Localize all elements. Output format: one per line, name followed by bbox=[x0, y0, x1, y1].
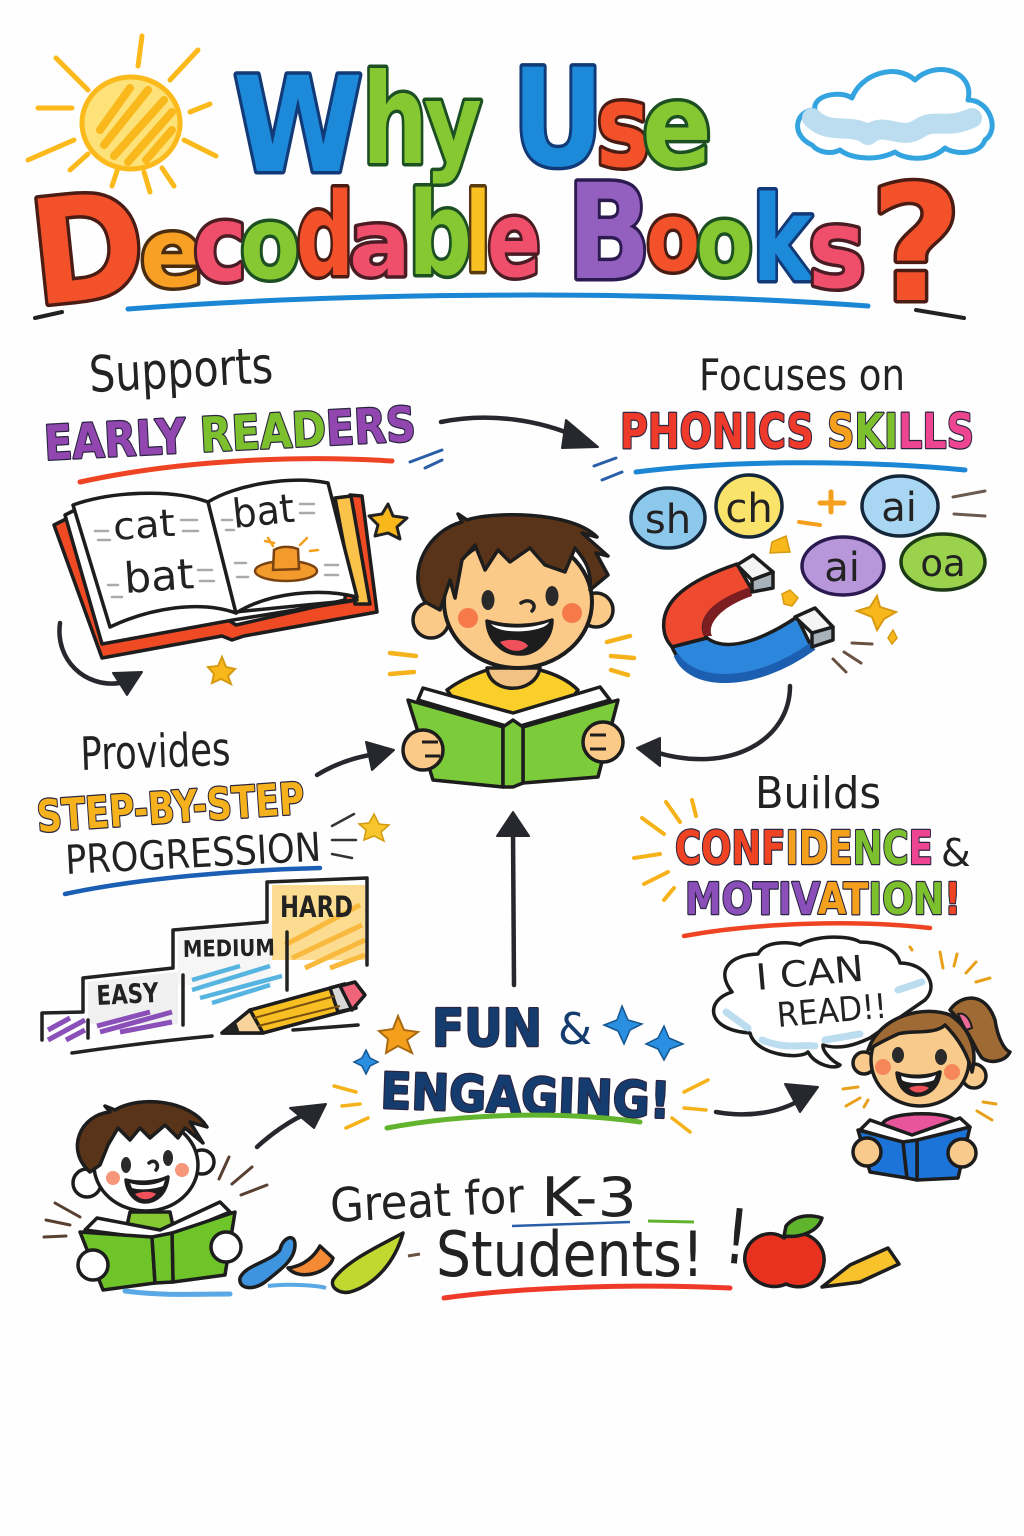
title: o bbox=[646, 183, 700, 293]
title: b bbox=[408, 168, 472, 302]
chart: easy medium hard steps: EASY bbox=[96, 978, 160, 1012]
heading: great for k-3 students bbox=[329, 1166, 753, 1298]
heading: fun and engaging bbox=[334, 999, 708, 1132]
title underline bbox=[35, 295, 964, 318]
arrow: boy to fun bbox=[257, 1104, 326, 1147]
illustration: phonics bubbles: ai bbox=[824, 545, 860, 591]
heading: provides step-by-step progression bbox=[35, 722, 389, 894]
heading: provides step-by-step progression: Provides bbox=[79, 722, 231, 781]
illustration: phonics bubbles: sh bbox=[645, 497, 691, 543]
heading: supports early readers bbox=[43, 336, 442, 482]
illustration: phonics bubbles bbox=[631, 475, 985, 595]
illustration: boy reading at centre bbox=[390, 514, 634, 787]
illustration: phonics bubbles: ch bbox=[725, 486, 773, 532]
title bbox=[22, 40, 962, 340]
speech bubble: I can read: READ!! bbox=[775, 987, 888, 1036]
icon: yellow crayon bbox=[822, 1248, 899, 1287]
chart: easy medium hard steps: HARD bbox=[280, 890, 353, 924]
title: s bbox=[596, 60, 650, 194]
title: W bbox=[233, 49, 363, 203]
title: a bbox=[349, 192, 411, 297]
arrow: curved under book bbox=[59, 623, 142, 695]
title: y bbox=[424, 61, 482, 186]
speech bubble: I can read: I CAN bbox=[754, 949, 865, 999]
arrow: provides to boy bbox=[317, 742, 394, 775]
icon: small star under book bbox=[208, 657, 235, 684]
title: h bbox=[362, 48, 428, 193]
heading: builds confidence and motivation bbox=[634, 768, 971, 936]
illustration: boy reading bottom left bbox=[44, 1102, 267, 1294]
heading: supports early readers: Supports bbox=[88, 336, 274, 404]
heading: great for k-3 students: K-3 bbox=[541, 1166, 637, 1229]
illustration: horseshoe magnet bbox=[664, 536, 897, 681]
heading: provides step-by-step progression: STEP-BY-STEP bbox=[35, 773, 306, 843]
heading: focuses on phonics skills: PHONICS SKILLS bbox=[620, 404, 974, 460]
arrow: fun to girl bbox=[716, 1084, 818, 1114]
title: D bbox=[22, 160, 153, 340]
arrow: readers to phonics bbox=[441, 418, 598, 448]
title: e bbox=[140, 199, 204, 309]
illustration: open book with words: cat bbox=[112, 501, 176, 549]
illustration: girl reading bbox=[843, 998, 1010, 1180]
heading: great for k-3 students: ! bbox=[720, 1191, 753, 1282]
heading: builds confidence and motivation: MOTIVATION! bbox=[685, 874, 961, 925]
icon: apple bbox=[745, 1216, 824, 1287]
speech bubble: I can read bbox=[714, 937, 990, 1067]
heading: great for k-3 students: Students! bbox=[436, 1218, 704, 1291]
title: s bbox=[808, 185, 866, 313]
icon: sun bbox=[28, 36, 216, 192]
chart: easy medium hard steps bbox=[42, 878, 367, 1053]
heading: fun and engaging: & bbox=[558, 1004, 592, 1055]
heading: focuses on phonics skills bbox=[594, 350, 974, 480]
arrow: fun up to boy bbox=[497, 812, 529, 985]
title: o bbox=[696, 185, 753, 299]
illustration: phonics bubbles: oa bbox=[920, 542, 966, 585]
icon: cloud bbox=[798, 70, 992, 158]
chart: easy medium hard steps: MEDIUM bbox=[183, 935, 275, 963]
heading: fun and engaging: ENGAGING! bbox=[380, 1062, 671, 1130]
heading: supports early readers: EARLY READERS bbox=[43, 397, 417, 472]
title: U bbox=[512, 40, 604, 197]
icon: pencil bbox=[222, 982, 365, 1033]
icon: crayons bbox=[240, 1233, 403, 1292]
heading: builds confidence and motivation: & bbox=[941, 831, 971, 875]
heading: focuses on phonics skills: Focuses on bbox=[699, 350, 905, 401]
title: l bbox=[465, 169, 491, 297]
title: ? bbox=[870, 151, 962, 338]
heading: great for k-3 students: Great for bbox=[329, 1169, 526, 1234]
illustration: open book with words: bat bbox=[122, 549, 196, 603]
arrow: magnet to boy bbox=[637, 686, 790, 766]
illustration: open book with words: bat bbox=[230, 486, 297, 538]
illustration: open book with words bbox=[54, 480, 377, 658]
heading: fun and engaging: FUN bbox=[432, 999, 542, 1059]
title: e bbox=[487, 179, 541, 301]
heading: builds confidence and motivation: CONFIDENCE bbox=[675, 821, 933, 875]
title: d bbox=[296, 169, 354, 303]
title: e bbox=[642, 60, 712, 194]
title: o bbox=[240, 185, 300, 302]
heading: builds confidence and motivation: Builds bbox=[755, 768, 881, 819]
title: c bbox=[193, 183, 247, 305]
heading: provides step-by-step progression: PROGRESSION bbox=[64, 825, 322, 884]
title: k bbox=[752, 170, 814, 308]
title: B bbox=[567, 156, 651, 310]
icon: star near book bbox=[369, 504, 407, 539]
illustration: phonics bubbles: ai bbox=[881, 485, 917, 531]
